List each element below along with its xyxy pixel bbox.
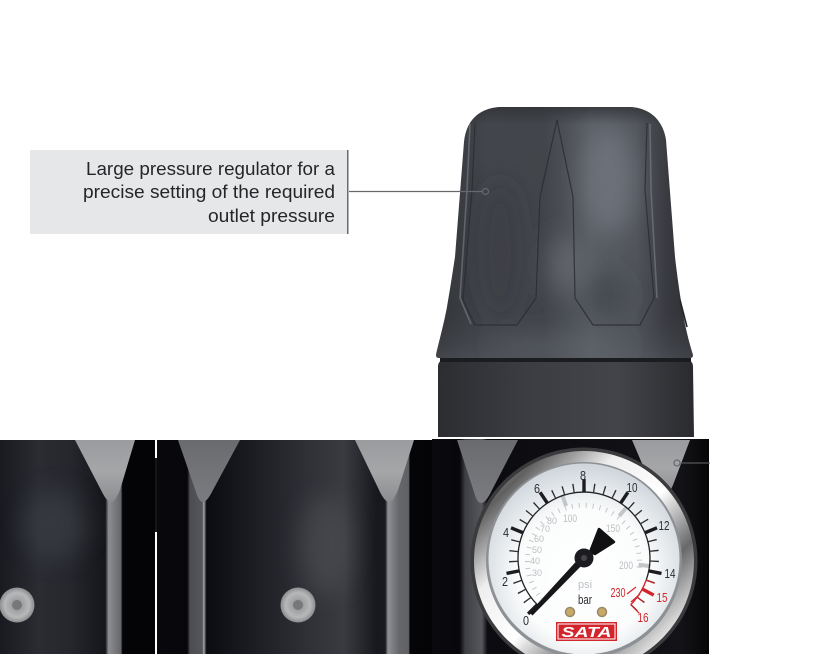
wedge (632, 440, 690, 497)
red zone (627, 580, 655, 613)
bar labels (502, 468, 676, 628)
psi labels: psi (578, 579, 592, 591)
red labels: 15 (656, 590, 668, 605)
wedge (355, 440, 414, 502)
psi labels: 40 (530, 556, 540, 566)
leader line: regulator (349, 188, 488, 194)
psi labels: 100 (563, 513, 577, 525)
collar shadow (440, 357, 691, 362)
bar scale minor ticks (514, 487, 654, 608)
base block: centre (157, 440, 432, 654)
screw (0, 588, 34, 622)
psi scale (527, 495, 651, 600)
wedge (457, 440, 518, 503)
screw (280, 588, 316, 622)
block gap (155, 458, 157, 532)
block sheen (298, 501, 350, 588)
psi labels: 30 (532, 568, 542, 578)
psi labels: 60 (534, 534, 544, 544)
callout text: outlet pressure (208, 206, 335, 226)
brass screws (566, 608, 606, 616)
bar labels: 0 (523, 613, 529, 628)
regulator knob (436, 107, 693, 358)
psi labels: 50 (532, 545, 542, 555)
regulator collar (438, 361, 694, 437)
gauge needle (530, 529, 614, 616)
callout text: precise setting of the required (83, 182, 335, 202)
base block: left (0, 440, 155, 654)
bar labels: bar (578, 592, 592, 607)
psi labels: 80 (547, 516, 557, 526)
wedge (178, 440, 240, 502)
wedge (75, 440, 135, 502)
psi labels (530, 513, 633, 591)
block sheen (26, 495, 86, 555)
bar labels: 14 (664, 566, 676, 581)
bar scale major ticks (507, 479, 661, 614)
SATA logo: SATA (562, 624, 612, 641)
red labels: 16 (638, 610, 648, 625)
psi labels: 200 (619, 560, 633, 572)
red labels (610, 585, 668, 625)
panel: regulator callout (30, 150, 348, 234)
gauge bezel (470, 448, 698, 654)
psi labels: 70 (540, 524, 550, 534)
regulator body (436, 107, 694, 437)
bar labels: 10 (626, 480, 638, 495)
bar labels: 4 (503, 525, 509, 540)
callout text: Large pressure regulator for a (86, 159, 336, 179)
psi labels: 150 (606, 523, 620, 535)
knob grip ribs (463, 120, 654, 325)
bar labels: 2 (502, 574, 508, 589)
bar labels: 12 (658, 518, 670, 533)
callout text (83, 159, 336, 226)
SATA logo (556, 622, 617, 641)
red labels: 230 (610, 585, 626, 600)
bar labels: 6 (534, 481, 540, 496)
bar labels: 8 (580, 468, 586, 483)
knob highlights (520, 125, 642, 350)
leader line: block (674, 460, 710, 466)
pressure gauge (470, 448, 698, 654)
base block: right (432, 439, 709, 654)
infographic: pressure regulator product view (0, 107, 710, 654)
bar scale arc (518, 492, 650, 605)
